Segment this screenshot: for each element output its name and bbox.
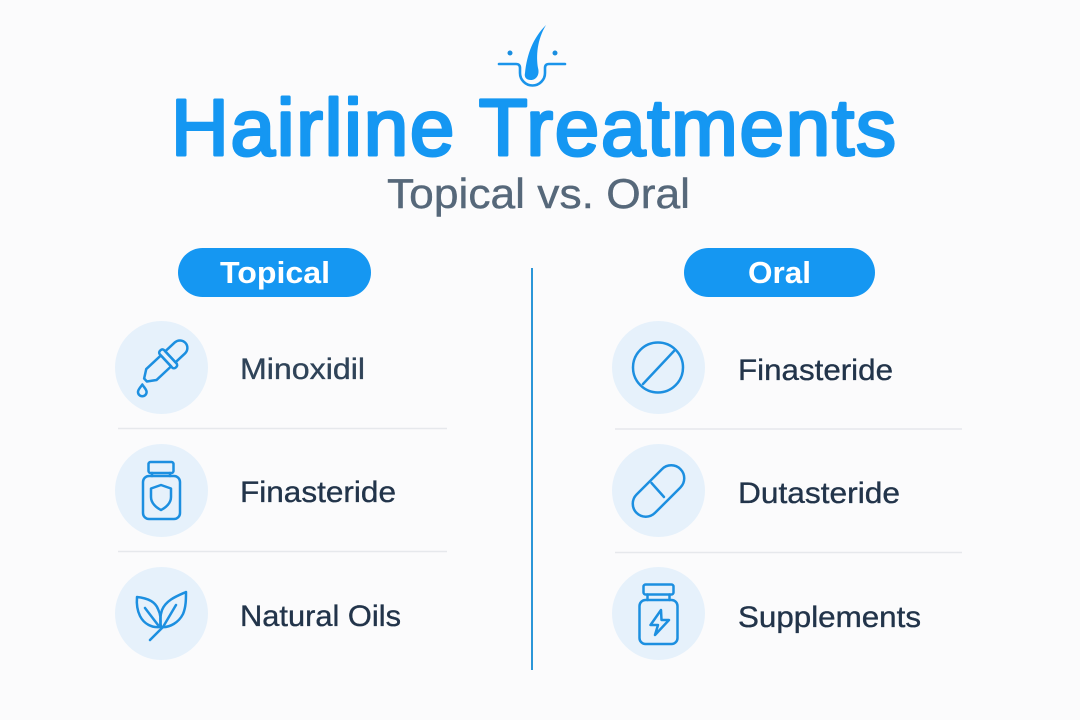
row: Finasteride (oral) — [612, 321, 893, 414]
panel: oral column — [612, 248, 962, 660]
panel: topical column — [115, 248, 447, 660]
row: Dutasteride — [612, 444, 900, 537]
icon: bottle with shield — [143, 462, 180, 519]
label: Finasteride — [240, 476, 396, 509]
icon: tablet — [633, 342, 683, 392]
topical heading pill: Topical — [220, 255, 330, 290]
oral heading pill — [684, 248, 875, 297]
icon: dropper — [138, 334, 193, 396]
label: Finasteride — [738, 354, 893, 387]
topical heading pill — [178, 248, 371, 297]
row: Supplements — [612, 567, 921, 660]
title: Hairline Treatments — [171, 83, 896, 172]
icon: hair follicle — [499, 25, 565, 85]
label: Dutasteride — [738, 477, 900, 510]
subtitle: Topical vs. Oral — [387, 170, 690, 217]
label: Minoxidil — [240, 353, 365, 386]
column divider — [531, 268, 533, 670]
label: Natural Oils — [240, 600, 401, 633]
row: Natural Oils — [115, 567, 401, 660]
icon: leaves — [137, 592, 186, 640]
oral heading pill: Oral — [748, 255, 811, 290]
icon: capsule — [627, 460, 690, 522]
row: Minoxidil — [115, 321, 365, 414]
row: Finasteride — [115, 444, 396, 537]
label: Supplements — [738, 601, 921, 634]
icon: bottle with bolt — [640, 584, 678, 644]
